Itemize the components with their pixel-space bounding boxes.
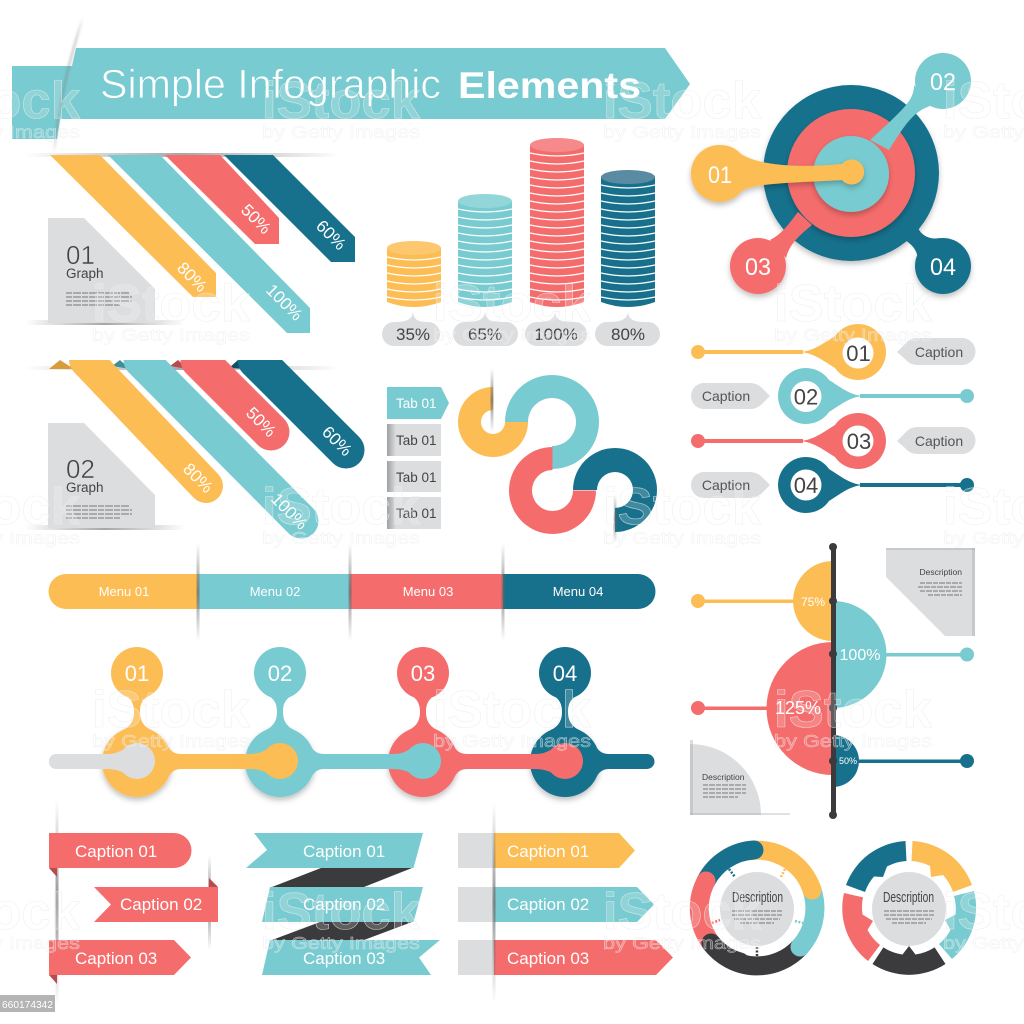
arrow caption 01: Caption 01 bbox=[507, 842, 589, 861]
pin 03 bbox=[691, 413, 886, 469]
watermark: by Getty Images bbox=[92, 731, 250, 751]
value tags bbox=[382, 312, 660, 346]
pin 03: 03 bbox=[847, 429, 871, 454]
stock image id badge bbox=[0, 995, 55, 1012]
bar 01 to 02 bbox=[172, 754, 252, 769]
yellow pointer 01: 01 bbox=[708, 162, 732, 189]
caption 01 flag: Caption 01 bbox=[75, 842, 157, 861]
ribbon teal 100%: 100% bbox=[262, 280, 306, 325]
caption 01 flag bbox=[49, 833, 192, 877]
bar 35% bbox=[387, 241, 441, 307]
pin 01: 01 bbox=[846, 341, 871, 366]
vertical tabs bbox=[387, 387, 449, 529]
graph 01 card: 01 bbox=[66, 240, 95, 270]
dark outer ring with 04 bbox=[763, 85, 971, 294]
stacked coin bar chart bbox=[382, 138, 660, 346]
menu 02: Menu 02 bbox=[250, 584, 300, 599]
tab 4: Tab 01 bbox=[396, 506, 437, 521]
ribbon coral 50%: 50% bbox=[242, 403, 280, 441]
pin 02: 02 bbox=[794, 384, 818, 410]
node 02 bbox=[240, 647, 324, 797]
ribbon yellow 80% bbox=[50, 155, 216, 297]
watermark: iStock bbox=[774, 275, 932, 333]
segment 50% bbox=[833, 735, 974, 787]
value tags: 100% bbox=[534, 325, 578, 344]
menu 04 bbox=[503, 574, 656, 609]
half-circle axis chart bbox=[690, 543, 975, 819]
ribbon teal 100% bbox=[108, 155, 310, 333]
graph 01: diagonal arrow ribbons bbox=[25, 153, 355, 333]
watermark: by Getty Images bbox=[603, 933, 761, 953]
bar 02 to 03 bbox=[315, 754, 395, 769]
segment 100%: 100% bbox=[840, 647, 880, 664]
tab 3: Tab 01 bbox=[396, 470, 437, 485]
watermark: by Getty Images bbox=[433, 325, 591, 345]
arrow caption 03 bbox=[494, 940, 673, 975]
description card bottom left bbox=[690, 740, 790, 815]
teal core with 02: 02 bbox=[930, 69, 956, 96]
watermark: by Getty Images bbox=[774, 731, 932, 751]
title banner bbox=[12, 17, 690, 153]
menu 01 bbox=[48, 574, 198, 609]
caption 04: Caption bbox=[702, 477, 750, 493]
fold band 1 bbox=[272, 868, 412, 887]
arrow caption 02 bbox=[494, 887, 654, 922]
caption 03: Caption bbox=[915, 433, 963, 449]
ribbon dark teal 60%: 60% bbox=[318, 422, 356, 460]
watermark: by Getty Images bbox=[603, 528, 761, 548]
node 03 bbox=[383, 647, 467, 797]
watermark: by Getty Images bbox=[603, 122, 761, 142]
graph 02 card bbox=[48, 423, 155, 528]
watermark: iStock bbox=[92, 681, 250, 739]
dark outer ring with 04: 04 bbox=[930, 254, 956, 281]
graph 02: rounded diagonal ribbons bbox=[25, 360, 356, 534]
watermark: iStock bbox=[262, 478, 420, 536]
value tags: 35% bbox=[396, 325, 430, 344]
description card top right bbox=[886, 548, 975, 636]
watermark: by Getty Images bbox=[774, 325, 932, 345]
node 01 bbox=[49, 647, 181, 797]
active tab bbox=[387, 387, 449, 419]
node 02: 02 bbox=[268, 661, 292, 686]
bar 80% bbox=[601, 170, 655, 307]
watermark: iStock bbox=[262, 883, 420, 941]
watermark: by Getty Images bbox=[262, 933, 420, 953]
caption 01 bbox=[897, 338, 976, 365]
caption ribbon: zigzag column bbox=[246, 833, 440, 975]
caption 01: Caption bbox=[915, 344, 963, 360]
pin 04: 04 bbox=[794, 473, 818, 498]
graph 02 card: Graph bbox=[66, 480, 104, 495]
arrow caption 01 bbox=[494, 833, 635, 868]
caption 02: Caption bbox=[702, 388, 750, 404]
coral ring with 03 bbox=[730, 109, 915, 294]
pin 02 bbox=[778, 368, 974, 424]
watermark: by Getty Images bbox=[262, 122, 420, 142]
donut chart left bbox=[699, 850, 815, 966]
tab 2 bbox=[387, 424, 441, 456]
title text: Simple Infographic bbox=[100, 61, 441, 107]
ribbon teal 100%: 100% bbox=[267, 489, 311, 534]
yellow pointer 01 bbox=[691, 145, 864, 202]
description card bottom left: Description bbox=[702, 772, 745, 782]
pin 04 bbox=[778, 457, 974, 513]
caption arrows: right column bbox=[458, 803, 673, 1003]
segment 75% bbox=[691, 561, 833, 641]
numbered timeline bbox=[49, 647, 654, 797]
ribbon dark teal 60% bbox=[224, 155, 355, 262]
graph 02 card: 02 bbox=[66, 454, 95, 484]
bar 100% bbox=[530, 138, 584, 307]
ribbon caption 02: Caption 02 bbox=[303, 895, 385, 914]
caption 02 flag: Caption 02 bbox=[120, 895, 202, 914]
node 04 bbox=[525, 647, 609, 797]
value tags: 65% bbox=[468, 325, 502, 344]
pin callouts bbox=[691, 324, 976, 513]
menu 03 bbox=[350, 574, 503, 609]
watermark: iStock bbox=[433, 275, 591, 333]
ribbon coral 50% bbox=[199, 360, 280, 441]
ribbon dark teal 60% bbox=[256, 360, 356, 460]
tick marks bbox=[712, 869, 803, 957]
segment 125% bbox=[691, 642, 833, 775]
ribbon yellow 80%: 80% bbox=[173, 258, 211, 296]
ribbon caption 03 bbox=[262, 940, 440, 975]
node 01: 01 bbox=[125, 661, 149, 686]
grey start bar bbox=[49, 754, 137, 769]
watermark: iStock bbox=[774, 681, 932, 739]
interlocking ring chain bbox=[458, 368, 657, 543]
arrow caption 03: Caption 03 bbox=[507, 949, 589, 968]
watermark: by Getty Images bbox=[262, 528, 420, 548]
ribbon caption 01: Caption 01 bbox=[303, 842, 385, 861]
value tags: 80% bbox=[611, 325, 645, 344]
ribbon coral 50% bbox=[165, 155, 279, 244]
fold band 2 bbox=[272, 922, 412, 940]
menu bar bbox=[48, 543, 656, 641]
title banner: Elements bbox=[458, 65, 641, 106]
menu 04: Menu 04 bbox=[553, 584, 603, 599]
segment 50%: 50% bbox=[839, 756, 857, 766]
watermark: iStock bbox=[92, 275, 250, 333]
node 03: 03 bbox=[411, 661, 435, 686]
description card top right: Description bbox=[919, 567, 962, 577]
segment 75%: 75% bbox=[801, 595, 825, 609]
ribbon yellow 80%: 80% bbox=[179, 459, 217, 497]
watermark: iStock bbox=[603, 478, 761, 536]
teal core with 02 bbox=[813, 53, 971, 212]
ribbon caption 02 bbox=[262, 887, 423, 922]
donut centre: Description bbox=[732, 889, 783, 906]
watermark: iStock bbox=[433, 681, 591, 739]
graph 01 card: Graph bbox=[66, 266, 104, 281]
segment 125%: 125% bbox=[775, 698, 821, 718]
menu 01: Menu 01 bbox=[99, 584, 149, 599]
watermark: iStock bbox=[603, 883, 761, 941]
watermark: iStock bbox=[603, 72, 761, 130]
target diagram bbox=[691, 53, 971, 294]
arrow caption 02: Caption 02 bbox=[507, 895, 589, 914]
tab 2: Tab 01 bbox=[396, 433, 437, 448]
caption flags: left column bbox=[49, 800, 218, 1005]
menu 03: Menu 03 bbox=[403, 584, 453, 599]
graph 01 card bbox=[48, 218, 155, 323]
caption 03 bbox=[897, 427, 976, 454]
axis bbox=[829, 543, 837, 819]
pin 01 bbox=[691, 324, 886, 380]
ribbon yellow 80% bbox=[86, 360, 217, 497]
ribbon teal 100% bbox=[141, 360, 311, 534]
tab 3 bbox=[387, 461, 441, 492]
active tab: Tab 01 bbox=[396, 396, 437, 411]
watermark: by Getty Images bbox=[433, 731, 591, 751]
stock image id badge: 660174342 bbox=[2, 999, 53, 1011]
bar 65% bbox=[458, 194, 512, 307]
bar 03 to 04 bbox=[458, 754, 538, 769]
ribbon dark teal 60%: 60% bbox=[312, 216, 350, 254]
caption 02 flag bbox=[94, 878, 218, 922]
caption 04 bbox=[691, 472, 770, 498]
watermark: by Getty Images bbox=[92, 325, 250, 345]
ribbon caption 03: Caption 03 bbox=[303, 949, 385, 968]
tab 4 bbox=[387, 497, 441, 529]
watermark: iStock bbox=[262, 72, 420, 130]
caption 03 flag: Caption 03 bbox=[75, 949, 157, 968]
menu 02 bbox=[198, 574, 350, 609]
caption 03 flag bbox=[49, 940, 191, 984]
end bar bbox=[598, 754, 654, 769]
coral ring with 03: 03 bbox=[745, 254, 771, 281]
caption 02 bbox=[691, 383, 770, 409]
ribbon coral 50%: 50% bbox=[237, 200, 275, 238]
donut centre: Description bbox=[883, 889, 934, 906]
donut chart right bbox=[842, 841, 976, 975]
ribbon caption 01 bbox=[246, 833, 423, 868]
node 04: 04 bbox=[553, 661, 577, 686]
segment 100% bbox=[833, 601, 974, 708]
